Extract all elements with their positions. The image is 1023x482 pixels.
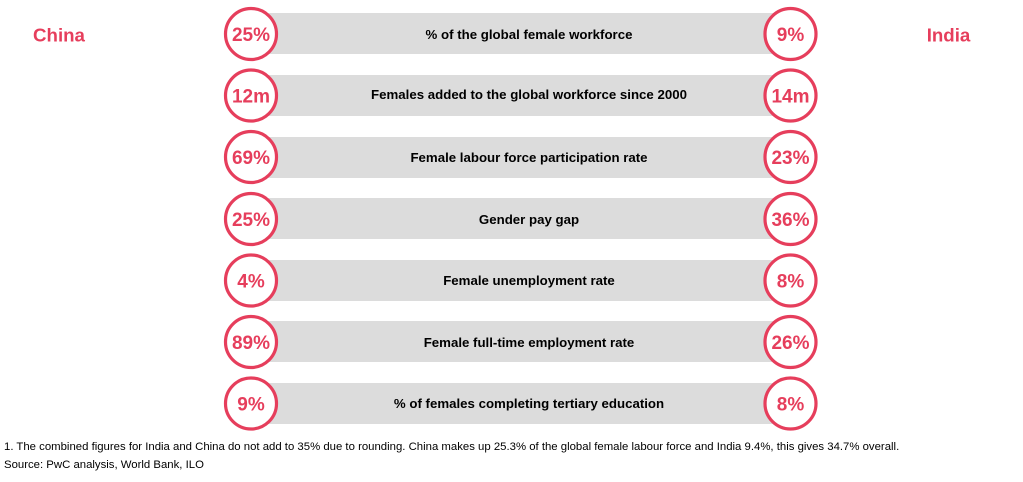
row: global female workforce share <box>226 8 816 60</box>
row: tertiary education: 8% <box>777 394 804 416</box>
row: female full-time employment <box>226 316 816 368</box>
row: global female workforce share: % of the global female workforce <box>426 27 632 42</box>
heading: India: India <box>927 24 971 46</box>
row: female unemployment <box>226 255 816 306</box>
row: gender pay gap: Gender pay gap <box>479 212 579 227</box>
row: female labour force participation: 23% <box>771 148 810 169</box>
footnote: 1. The combined figures for India and China do not add to 35% due to rounding. China makes up 25.3% of the global female labour force and India 9.4%, this gives 34.7% overall. <box>4 441 899 453</box>
row: gender pay gap: 36% <box>771 210 810 231</box>
source line: Source: PwC analysis, World Bank, ILO <box>4 459 204 471</box>
row: females added to workforce <box>226 70 816 121</box>
row: global female workforce share: 25% <box>232 25 270 46</box>
row: female labour force participation <box>226 132 816 182</box>
row: female unemployment: 8% <box>777 272 804 292</box>
row: global female workforce share: 9% <box>777 25 804 46</box>
row: tertiary education <box>226 378 816 429</box>
row: female unemployment: Female unemployment rate <box>443 273 615 288</box>
row: female full-time employment: 89% <box>232 333 270 354</box>
row: gender pay gap <box>226 194 816 244</box>
row: females added to workforce: 12m <box>232 86 270 108</box>
row: gender pay gap: 25% <box>232 210 270 231</box>
heading: China: China <box>33 24 86 46</box>
row: female labour force participation: 69% <box>232 148 270 169</box>
row: tertiary education: % of females completing tertiary education <box>394 396 664 411</box>
row: female full-time employment: 26% <box>771 333 810 354</box>
row: female full-time employment: Female full-time employment rate <box>424 335 634 350</box>
row: females added to workforce: 14m <box>771 86 810 108</box>
row: females added to workforce: Females added to the global workforce since 2000 <box>371 87 687 102</box>
row: female labour force participation: Female labour force participation rate <box>410 150 648 165</box>
row: tertiary education: 9% <box>237 394 265 416</box>
row: female unemployment: 4% <box>237 272 265 292</box>
